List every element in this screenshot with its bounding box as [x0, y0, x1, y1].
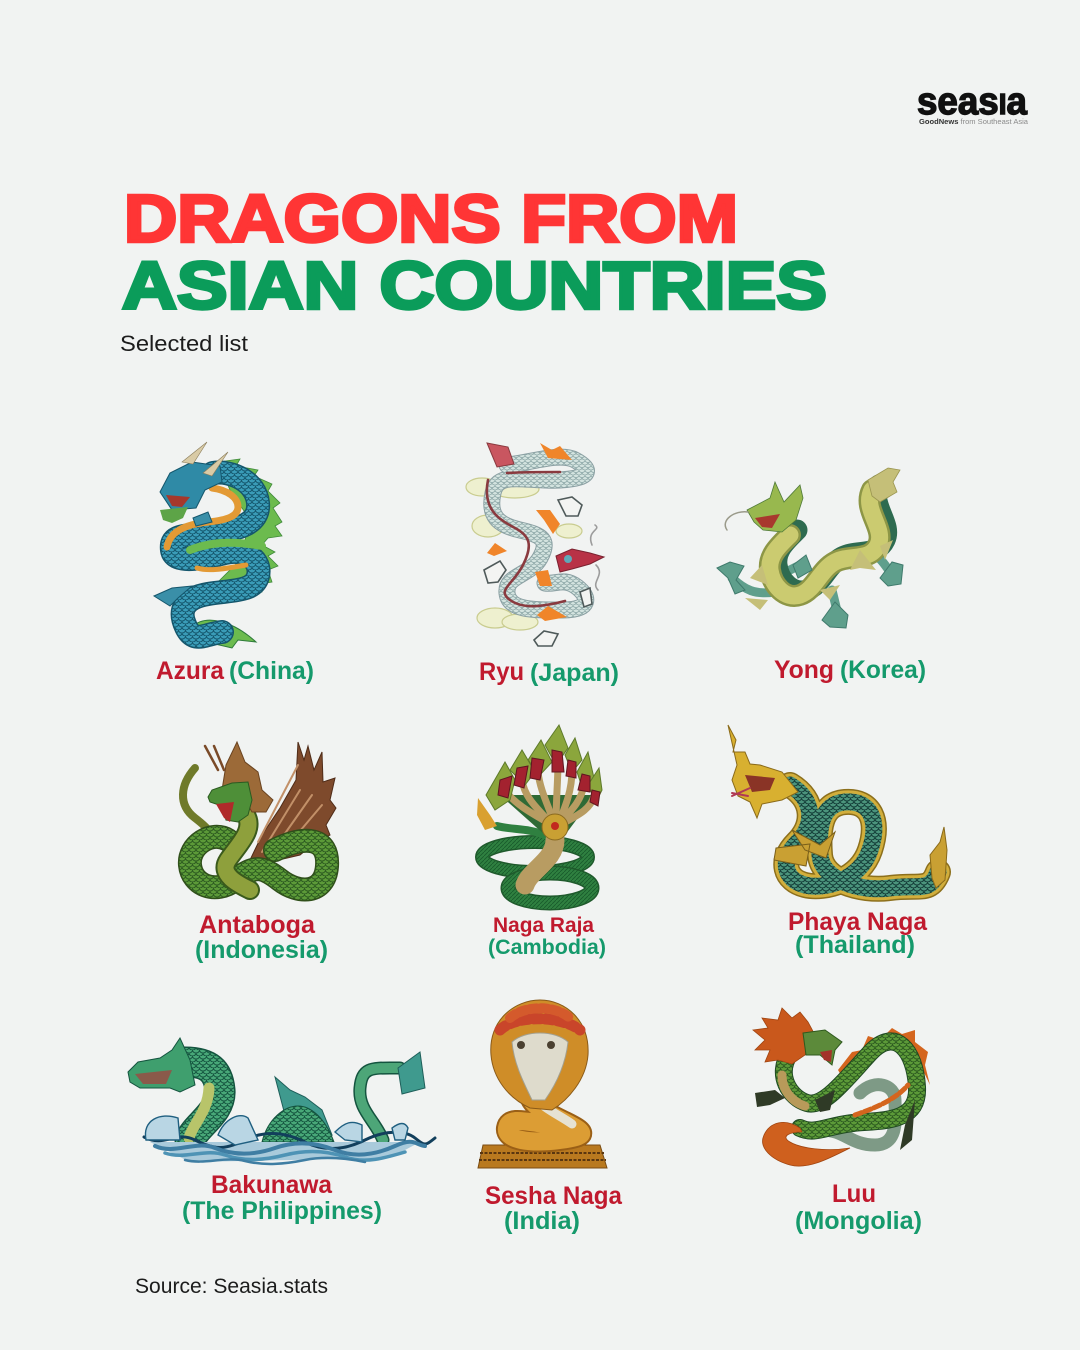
panel: Antaboga, Indonesia	[183, 742, 336, 964]
label: Azura (China): (China)	[229, 657, 314, 685]
label: Luu (Mongolia): Luu	[832, 1180, 876, 1208]
title: ASIAN COUNTRIES	[122, 248, 827, 324]
icon: Yong dragon	[717, 468, 903, 628]
label: Ryu (Japan): (Japan)	[530, 659, 619, 687]
icon: Phaya Naga serpent	[728, 725, 947, 889]
label: Yong (Korea): Yong	[774, 656, 834, 684]
icon: Luu dragon	[753, 1008, 930, 1166]
panel: Luu, Mongolia	[753, 1008, 930, 1235]
label: Bakunawa (The Philippines): (The Philippines)	[182, 1197, 382, 1225]
source note: Source: Seasia.stats	[135, 1275, 328, 1298]
panel: Ryu, Japan	[466, 443, 619, 687]
label: Sesha Naga (India): (India)	[504, 1207, 580, 1235]
subtitle: Selected list	[120, 331, 248, 356]
medallion	[542, 814, 568, 840]
icon: Azura dragon	[154, 442, 282, 648]
icon: Naga Raja seven-headed serpent	[477, 725, 602, 903]
label: Phaya Naga (Thailand)	[788, 908, 928, 959]
label: Bakunawa (The Philippines): Bakunawa	[211, 1171, 333, 1199]
logo: seasia: GoodNews from Southeast Asia	[919, 117, 1029, 126]
icon: Ryu dragon	[466, 443, 604, 646]
title: DRAGONS FROM	[124, 182, 738, 256]
label: Antaboga (Indonesia): Antaboga	[199, 911, 316, 939]
panel: Phaya Naga, Thailand	[728, 725, 947, 959]
icon: Antaboga dragon	[183, 742, 336, 890]
label: Luu (Mongolia)	[795, 1180, 922, 1235]
panel: Sesha Naga, India	[478, 1000, 623, 1235]
label: Luu (Mongolia): (Mongolia)	[795, 1207, 922, 1235]
label: Azura (China)	[156, 657, 314, 685]
panel: Naga Raja, Cambodia	[477, 725, 606, 959]
label: Antaboga (Indonesia): (Indonesia)	[195, 936, 328, 964]
label: Ryu (Japan): Ryu	[479, 658, 524, 686]
label: Azura (China): Azura	[156, 657, 225, 685]
icon: Bakunawa sea serpent	[128, 1038, 435, 1164]
panel: Yong, Korea	[717, 468, 926, 684]
label: Yong (Korea)	[774, 656, 926, 684]
label: Phaya Naga (Thailand): Phaya Naga	[788, 908, 928, 936]
label: Yong (Korea): (Korea)	[840, 656, 926, 684]
label: Naga Raja (Cambodia): Naga Raja	[493, 914, 594, 937]
label: Naga Raja (Cambodia): (Cambodia)	[488, 936, 606, 959]
panel: Bakunawa, The Philippines	[128, 1038, 435, 1225]
label: Sesha Naga (India)	[485, 1182, 623, 1235]
label: Bakunawa (The Philippines)	[182, 1171, 382, 1225]
label: Phaya Naga (Thailand): (Thailand)	[795, 931, 915, 959]
label: Ryu (Japan)	[479, 658, 619, 687]
label: Naga Raja (Cambodia)	[488, 914, 606, 959]
panel: Azura, China	[154, 442, 314, 685]
label: Antaboga (Indonesia)	[195, 911, 328, 964]
label: Sesha Naga (India): Sesha Naga	[485, 1182, 623, 1210]
icon: Sesha Naga cobra	[478, 1000, 607, 1168]
logo: seasia: seasIa	[917, 81, 1028, 123]
title	[122, 182, 827, 324]
wing feathers	[250, 742, 336, 862]
